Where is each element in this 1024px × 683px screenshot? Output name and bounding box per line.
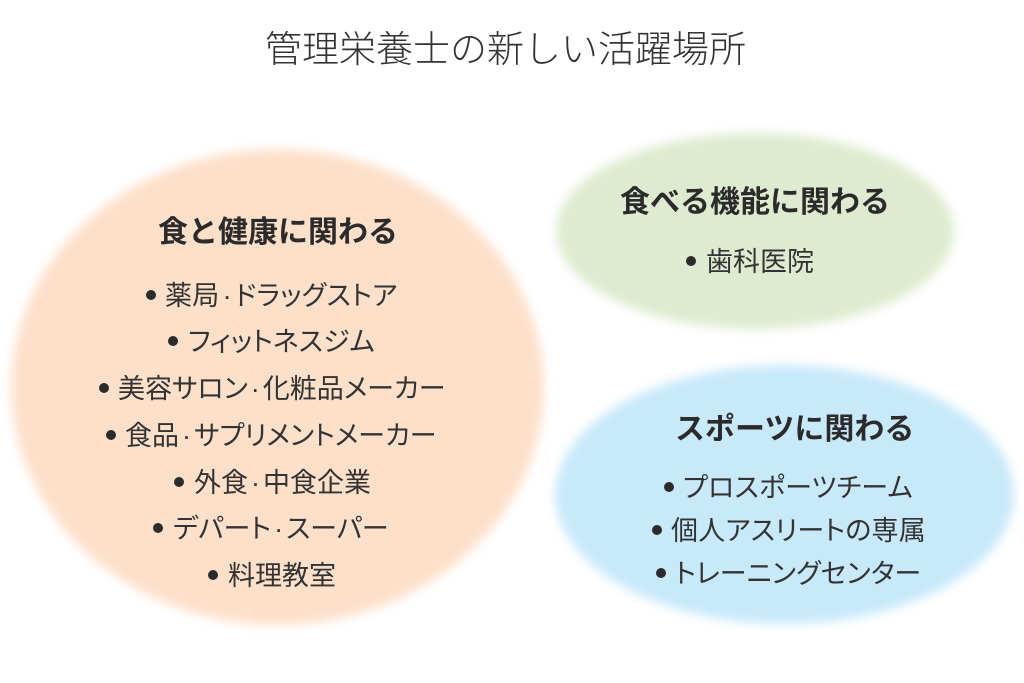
heading: sports: スポーツに関わる	[675, 413, 914, 446]
heading: food and health: 食と健康に関わる	[158, 216, 398, 249]
orange ellipse	[11, 149, 544, 625]
list: sports: プロスポーツチーム	[683, 473, 913, 503]
list: food and health: 料理教室	[228, 561, 336, 591]
list: food and health: フィットネスジム	[188, 327, 375, 357]
list: food and health: 美容サロン·化粧品メーカー	[118, 374, 446, 404]
list: sports	[652, 473, 926, 589]
list: sports: トレーニングセンター	[675, 559, 921, 589]
list: food and health: 外食·中食企業	[194, 468, 371, 498]
heading: eating function: 食べる機能に関わる	[620, 186, 890, 219]
panel: eating function	[552, 128, 958, 334]
list: eating function: 歯科医院	[706, 247, 814, 277]
list: food and health	[99, 281, 446, 591]
panel: food and health	[6, 144, 549, 630]
list: food and health: 薬局·ドラッグストア	[165, 281, 398, 311]
list: food and health: 食品·サプリメントメーカー	[125, 421, 437, 451]
green ellipse	[556, 133, 954, 329]
list: food and health: デパート·スーパー	[173, 514, 389, 544]
list: sports: 個人アスリートの専属	[671, 516, 926, 546]
blue ellipse	[555, 365, 1014, 624]
panel: sports	[550, 360, 1019, 629]
title: 管理栄養士の新しい活躍場所	[265, 29, 746, 70]
